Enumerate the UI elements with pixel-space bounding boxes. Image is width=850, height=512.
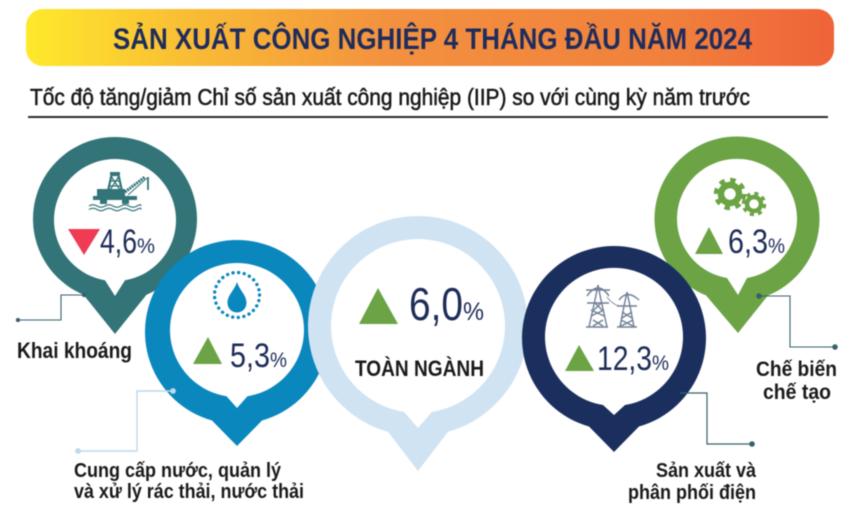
- value: 12,3%: %: [652, 352, 669, 375]
- subtitle: Tốc độ tăng/giảm Chỉ số sản xuất công nghiệp (IIP) so với cùng kỳ năm trước: [30, 84, 750, 110]
- value: 5,3%: 5,3: [230, 337, 270, 375]
- label: Cung cấp nước: [74, 460, 304, 503]
- label: Cung cấp nước: Cung cấp nước, quản lý: [74, 460, 282, 482]
- icon: offshore oil rig: [89, 172, 148, 211]
- pin: Toàn ngành: [308, 216, 528, 471]
- title: SẢN XUẤT CÔNG NGHIỆP 4 THÁNG ĐẦU NĂM 2024: [113, 22, 752, 56]
- icon: gears: [716, 180, 764, 214]
- indicator: up triangle: [193, 337, 222, 364]
- value: 5,3%: %: [270, 349, 287, 372]
- connector: Sản xuất và phân phối điện: [680, 393, 754, 446]
- label: Toàn ngành: TOÀN NGÀNH: [355, 356, 484, 381]
- pin: Khai khoáng: [33, 137, 197, 334]
- icon: water drop: [214, 272, 260, 318]
- indicator: down triangle: [68, 229, 100, 255]
- value: 6,0%: %: [463, 298, 484, 326]
- label: Khai khoáng: Khai khoáng: [17, 338, 132, 363]
- indicator: up triangle: [565, 345, 594, 371]
- connector: Cung cấp nước: [76, 389, 175, 453]
- value: 6,0%: 6,0: [409, 278, 463, 330]
- value: 6,3%: %: [768, 235, 785, 258]
- pin: Chế biến chế tạo: [654, 136, 819, 333]
- label: Chế biến chế tạo: Chế biến: [756, 358, 837, 381]
- indicator: up triangle: [695, 227, 723, 254]
- pin: Cung cấp nước: [145, 240, 329, 446]
- label: Sản xuất và phân phối điện: [628, 460, 757, 504]
- label: Sản xuất và phân phối điện: Sản xuất và: [656, 460, 757, 482]
- icon: power pylons: [586, 285, 639, 327]
- connector: Chế biến chế tạo: [757, 294, 837, 349]
- title banner: [26, 9, 834, 66]
- pin: Sản xuất và phân phối điện: [522, 246, 706, 452]
- label: Sản xuất và phân phối điện: phân phối điện: [628, 482, 756, 504]
- value: 12,3%: 12,3: [597, 340, 652, 378]
- indicator: up triangle: [359, 288, 398, 324]
- value: 4,6%: 4,6: [100, 223, 137, 261]
- label: Cung cấp nước: và xử lý rác thải, nước thải: [74, 481, 304, 503]
- value: 4,6%: %: [137, 235, 155, 258]
- label: Chế biến chế tạo: [756, 358, 837, 404]
- connector: Khai khoáng: [16, 293, 86, 322]
- label: Chế biến chế tạo: chế tạo: [763, 381, 831, 404]
- value: 6,3%: 6,3: [728, 223, 768, 261]
